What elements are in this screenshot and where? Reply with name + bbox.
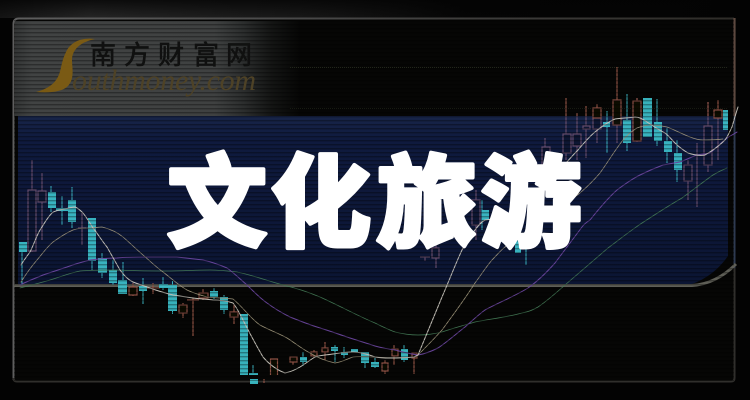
- title: 文化旅游: [167, 148, 581, 260]
- candlestick chart: [19, 67, 738, 384]
- filled cyan candles: [22, 94, 677, 375]
- hollow candles on black: [129, 67, 722, 383]
- tan average: [21, 125, 723, 363]
- moving average lines: [20, 107, 738, 373]
- top outer glow: [0, 0, 750, 18]
- hollow candles in blue band: [28, 98, 718, 268]
- purple average: [20, 132, 737, 355]
- white short average: [21, 107, 738, 373]
- green long average: [20, 168, 727, 335]
- logo chinese name: 南方财富网: [90, 35, 252, 72]
- logo swoosh S: [36, 39, 95, 92]
- logo: southmoney: [36, 35, 256, 97]
- logo backdrop: [15, 21, 300, 116]
- logo latin name: outhmoney.com: [72, 64, 256, 97]
- faint grid lines: [290, 68, 728, 108]
- blue band: [18, 116, 728, 284]
- band bottom rule: [14, 264, 736, 286]
